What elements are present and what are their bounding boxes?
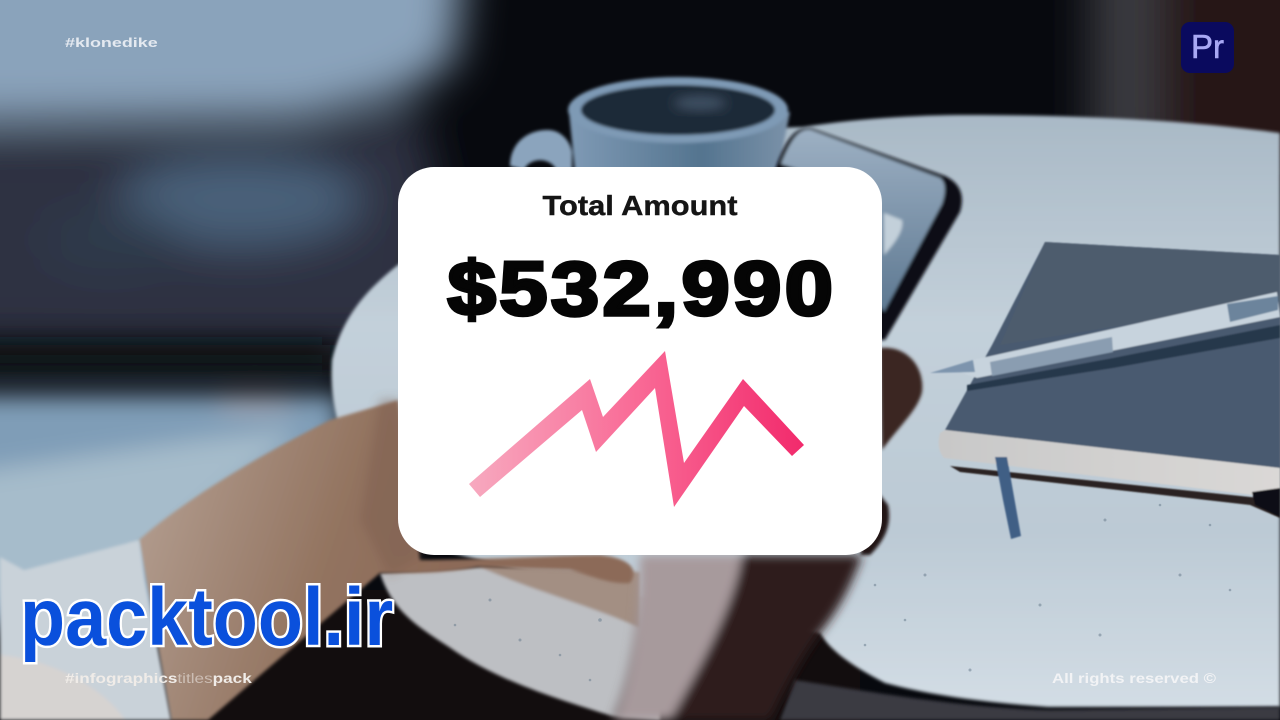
panel: total amount card [398, 167, 882, 555]
table speckles [454, 504, 1231, 681]
footer: rights notice: All rights reserved © [1052, 671, 1216, 686]
mug [510, 77, 790, 172]
tag: infographics titles pack: #infographicstitlespack [65, 671, 252, 686]
icon: Premiere Pro badge [1181, 22, 1234, 73]
value: $532,990: $532,990 [448, 247, 836, 332]
lower dark floor [160, 590, 860, 720]
left background: pillow and blanket [0, 0, 1280, 345]
dark shadow band and blue blanket, lower left [0, 345, 340, 625]
table bottom rim, right [780, 680, 1280, 720]
table edge, speckled stone [380, 566, 660, 720]
phone [775, 128, 962, 340]
icon: Premiere Pro badge: Pr [1191, 28, 1224, 65]
wrist behind card, right [860, 348, 922, 555]
hand and arm [139, 400, 634, 720]
watermark: packtool.ir: packtool.ir [20, 572, 393, 663]
notebook and pen [930, 242, 1280, 539]
fingers and hand below card [612, 555, 862, 720]
tag: klonedike: #klonedike [65, 35, 158, 50]
heading: Total Amount: Total Amount [542, 190, 738, 221]
shirt sleeve [0, 540, 171, 720]
round table [332, 115, 1280, 707]
